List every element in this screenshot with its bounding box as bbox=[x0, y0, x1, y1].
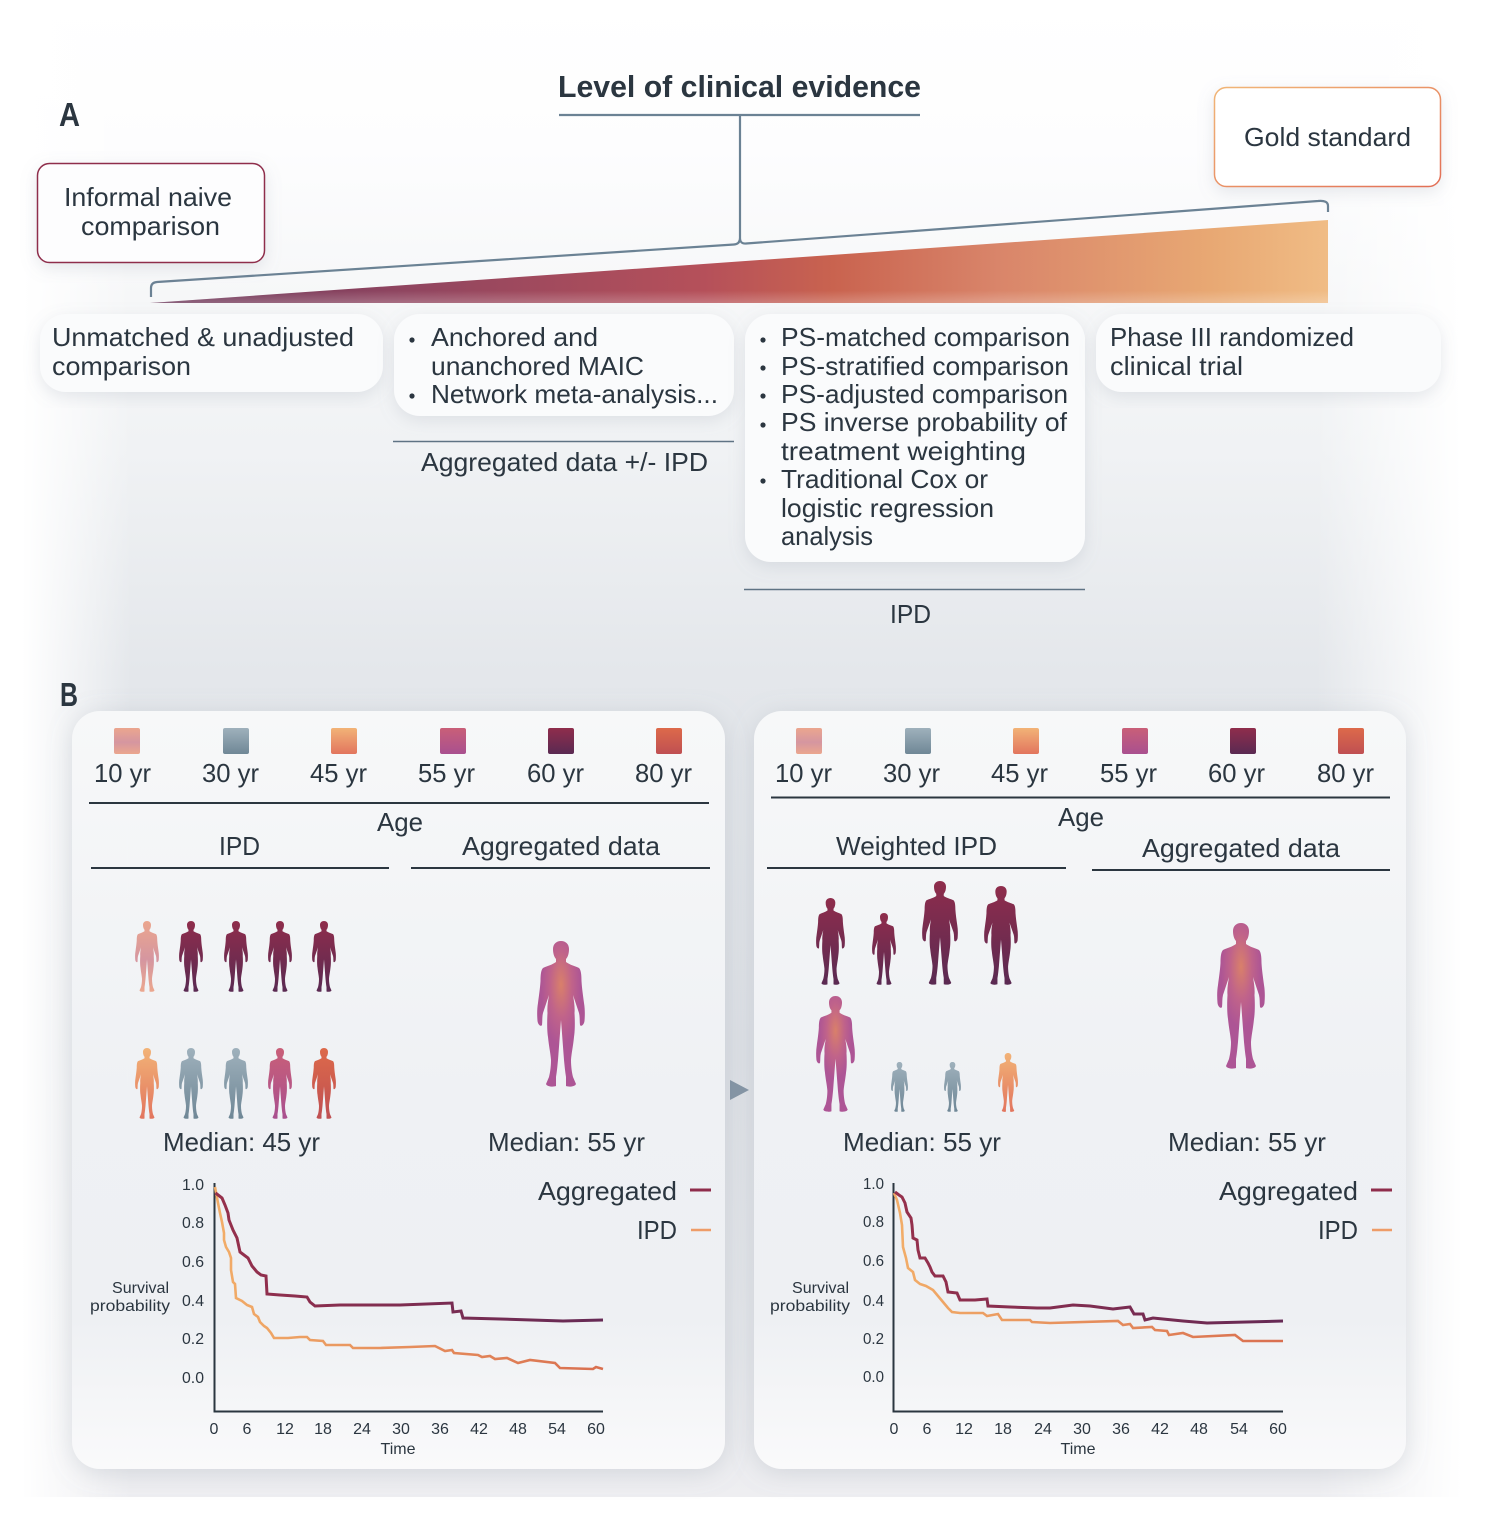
arrow between panels bbox=[730, 1080, 749, 1100]
median age: weighted IPD: Median: 55 yr bbox=[843, 1127, 1001, 1157]
x axis labels: 6 bbox=[923, 1421, 932, 1438]
panel label A: A bbox=[59, 96, 80, 133]
chart legend: IPD bbox=[1318, 1215, 1358, 1245]
median age: IPD: Median: 45 yr bbox=[163, 1127, 320, 1157]
y axis labels: 1.0 bbox=[182, 1177, 204, 1194]
card: MAIC and network meta-analysis bbox=[394, 314, 734, 416]
callout: informal naive comparison bbox=[38, 164, 264, 262]
age legend: 80 yr bbox=[635, 758, 692, 788]
column heading: aggregated data: Aggregated data bbox=[462, 831, 661, 861]
x axis labels: 36 bbox=[431, 1421, 449, 1438]
card: propensity score methods: Traditional Cox or bbox=[781, 464, 988, 494]
column heading: aggregated data: Aggregated data bbox=[1142, 833, 1341, 863]
age legend: 55 yr bbox=[1100, 758, 1157, 788]
callout: informal naive comparison: Informal naive bbox=[64, 182, 232, 212]
IPD population figures bbox=[135, 921, 336, 1119]
x axis labels: 48 bbox=[1190, 1421, 1208, 1438]
x axis labels: 12 bbox=[955, 1421, 973, 1438]
x axis labels: 60 bbox=[587, 1421, 605, 1438]
chart legend bbox=[538, 1176, 711, 1245]
y axis labels: 0.4 bbox=[182, 1293, 204, 1310]
card: propensity score methods: treatment weighting bbox=[781, 436, 1026, 466]
chart legend: Aggregated bbox=[538, 1176, 677, 1206]
age legend: Age bbox=[377, 807, 423, 837]
x axis labels: 12 bbox=[276, 1421, 294, 1438]
x axis labels: Time bbox=[381, 1441, 416, 1458]
x axis labels: 6 bbox=[243, 1421, 252, 1438]
card: propensity score methods: analysis bbox=[781, 521, 873, 551]
age legend: 10 yr bbox=[94, 758, 151, 788]
x axis labels: 0 bbox=[210, 1421, 219, 1438]
y axis labels: Survival bbox=[112, 1280, 169, 1297]
x axis labels: 36 bbox=[1112, 1421, 1130, 1438]
card: propensity score methods: logistic regression bbox=[781, 493, 994, 523]
age legend: 45 yr bbox=[991, 758, 1048, 788]
y axis labels: 0.8 bbox=[863, 1214, 884, 1231]
evidence bracket connector bbox=[151, 115, 1328, 297]
x axis labels: Time bbox=[1061, 1441, 1096, 1458]
card: propensity score methods: PS-adjusted comparison bbox=[781, 379, 1068, 409]
x axis labels: 0 bbox=[890, 1421, 899, 1438]
x axis labels: 42 bbox=[1151, 1421, 1169, 1438]
callout: gold standard: Gold standard bbox=[1244, 122, 1411, 152]
panel: IPD vs aggregated data before weighting bbox=[72, 711, 725, 1469]
callout: gold standard bbox=[1214, 88, 1440, 186]
card: unmatched comparison: Unmatched & unadjusted bbox=[52, 322, 354, 352]
column heading: weighted IPD: Weighted IPD bbox=[836, 831, 997, 861]
card: propensity score methods: PS inverse probability of bbox=[781, 407, 1068, 437]
age legend: 10 yr bbox=[775, 758, 832, 788]
weighted population figures bbox=[816, 881, 1018, 1112]
card: unmatched comparison: comparison bbox=[52, 351, 191, 381]
x axis labels: 24 bbox=[353, 1421, 371, 1438]
title: Level of clinical evidence bbox=[558, 69, 921, 104]
card: propensity score methods: PS-stratified comparison bbox=[781, 351, 1069, 381]
x axis labels: 42 bbox=[470, 1421, 488, 1438]
x axis labels: 18 bbox=[314, 1421, 332, 1438]
median age: aggregated: Median: 55 yr bbox=[488, 1127, 645, 1157]
age legend: 80 yr bbox=[1317, 758, 1374, 788]
age legend: 30 yr bbox=[883, 758, 940, 788]
chart legend bbox=[1219, 1176, 1392, 1245]
age legend: 30 yr bbox=[202, 758, 259, 788]
survival chart bbox=[90, 1177, 605, 1458]
age legend: 45 yr bbox=[310, 758, 367, 788]
panel A: level of clinical evidence bbox=[38, 69, 1441, 629]
y axis labels: 0.0 bbox=[863, 1369, 884, 1386]
card: phase III trial bbox=[1096, 314, 1441, 392]
y axis labels: 0.2 bbox=[863, 1331, 884, 1348]
age legend bbox=[771, 728, 1390, 832]
chart legend: IPD bbox=[637, 1215, 677, 1245]
aggregated population figure bbox=[537, 941, 585, 1087]
y axis labels: 0.2 bbox=[182, 1331, 204, 1348]
x axis labels: 60 bbox=[1269, 1421, 1287, 1438]
median age: aggregated: Median: 55 yr bbox=[1168, 1127, 1326, 1157]
chart legend: Aggregated bbox=[1219, 1176, 1358, 1206]
y axis labels: 0.6 bbox=[863, 1253, 884, 1270]
age legend: 55 yr bbox=[418, 758, 475, 788]
age legend: 60 yr bbox=[1208, 758, 1265, 788]
y axis labels: 0.4 bbox=[863, 1293, 884, 1310]
y axis labels: 0.8 bbox=[182, 1215, 204, 1232]
age legend: Age bbox=[1058, 802, 1104, 832]
x axis labels bbox=[890, 1421, 1287, 1458]
y axis labels: 0.0 bbox=[182, 1370, 204, 1387]
column heading: IPD: IPD bbox=[219, 831, 260, 861]
x axis labels: 54 bbox=[1230, 1421, 1248, 1438]
evidence gradient wedge bbox=[150, 220, 1328, 303]
panel: weighted IPD vs aggregated data bbox=[754, 711, 1406, 1469]
y axis labels: probability bbox=[770, 1298, 850, 1315]
x axis labels: 54 bbox=[548, 1421, 566, 1438]
age legend bbox=[89, 728, 709, 837]
x axis labels: 30 bbox=[1073, 1421, 1091, 1438]
x axis labels: 48 bbox=[509, 1421, 527, 1438]
x axis labels: 30 bbox=[392, 1421, 410, 1438]
y axis labels: 0.6 bbox=[182, 1254, 204, 1271]
y axis labels bbox=[90, 1177, 204, 1387]
y axis labels: probability bbox=[90, 1298, 170, 1315]
caption: IPD: IPD bbox=[890, 599, 931, 629]
age legend: 60 yr bbox=[527, 758, 584, 788]
panel label B: B bbox=[60, 676, 78, 713]
card: unmatched comparison bbox=[40, 314, 383, 392]
x axis labels bbox=[210, 1421, 605, 1458]
x axis labels: 24 bbox=[1034, 1421, 1052, 1438]
x axis labels: 18 bbox=[994, 1421, 1012, 1438]
card: MAIC and network meta-analysis: unanchored MAIC bbox=[431, 351, 644, 381]
card: propensity score methods bbox=[745, 314, 1085, 562]
card: propensity score methods: PS-matched comparison bbox=[781, 322, 1070, 352]
aggregated population figure bbox=[1217, 923, 1265, 1069]
y axis labels: 1.0 bbox=[863, 1176, 884, 1193]
caption: aggregated data +/- IPD: Aggregated data +/- IPD bbox=[421, 447, 708, 477]
card: phase III trial: Phase III randomized bbox=[1110, 322, 1354, 352]
callout: informal naive comparison: comparison bbox=[81, 211, 220, 241]
card: MAIC and network meta-analysis: Network meta-analysis... bbox=[431, 379, 718, 409]
card: phase III trial: clinical trial bbox=[1110, 351, 1243, 381]
survival chart bbox=[770, 1176, 1287, 1458]
card: MAIC and network meta-analysis: Anchored and bbox=[431, 322, 598, 352]
y axis labels: Survival bbox=[792, 1280, 849, 1297]
y axis labels bbox=[770, 1176, 884, 1386]
